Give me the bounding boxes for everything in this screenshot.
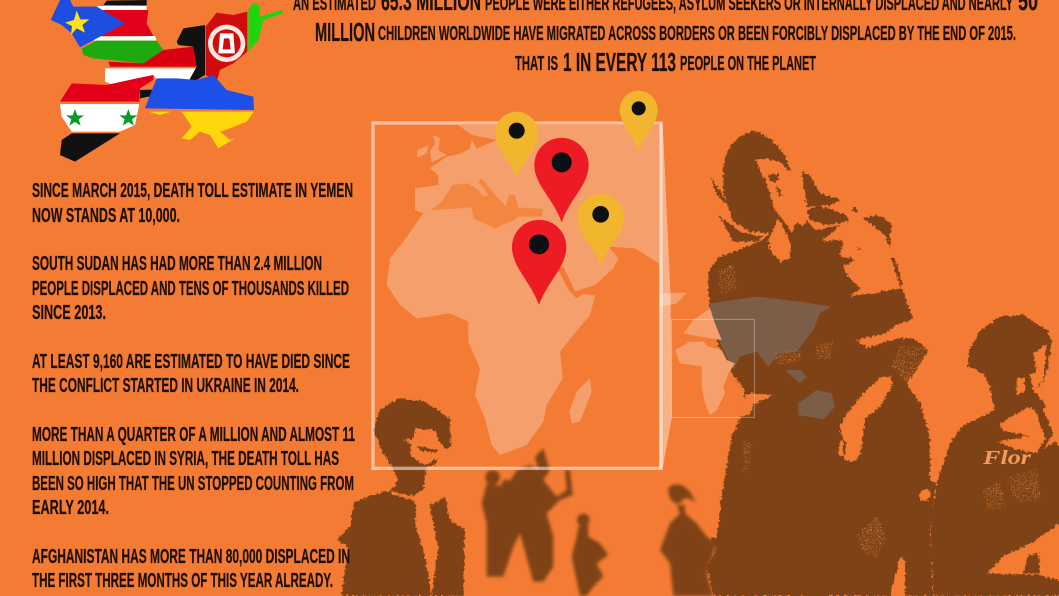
pin: yellow top centre bbox=[495, 112, 538, 178]
text block: Afghanistan bbox=[32, 545, 350, 592]
flag map: Syria bbox=[60, 75, 153, 162]
map frame bbox=[373, 123, 672, 468]
text block: Yemen: NOW STANDS AT 10,000. bbox=[32, 204, 180, 227]
text block: South Sudan: SOUTH SUDAN HAS HAD MORE THAN 2.4 MILLION bbox=[32, 252, 322, 275]
map pins bbox=[495, 91, 658, 305]
text block: South Sudan: PEOPLE DISPLACED AND TENS OF THOUSANDS KILLED bbox=[32, 277, 349, 300]
text block: Afghanistan: AFGHANISTAN HAS MORE THAN 80,000 DISPLACED IN bbox=[32, 545, 350, 568]
heading: global displacement statement: PEOPLE ON THE PLANET bbox=[680, 53, 816, 75]
text block: Syria: MILLION DISPLACED IN SYRIA, THE DEATH TOLL HAS bbox=[32, 447, 339, 470]
small world map over the woman bbox=[660, 293, 835, 419]
conflict country flag maps bbox=[51, 0, 283, 162]
flag map: South Sudan bbox=[51, 0, 163, 63]
text block: Syria: BEEN SO HIGH THAT THE UN STOPPED COUNTING FROM bbox=[32, 472, 354, 495]
text block: South Sudan: SINCE 2013. bbox=[32, 301, 106, 324]
text block: Syria bbox=[32, 423, 355, 519]
text block: South Sudan bbox=[32, 252, 349, 324]
silhouettes: distant walking group bbox=[482, 448, 717, 596]
text block: Afghanistan: THE FIRST THREE MONTHS OF THIS YEAR ALREADY. bbox=[32, 569, 333, 592]
flag map: Afghanistan bbox=[177, 3, 283, 82]
text block: Ukraine: AT LEAST 9,160 ARE ESTIMATED TO HAVE DIED SINCE bbox=[32, 350, 350, 373]
pin: yellow Arabia bbox=[577, 194, 624, 265]
text block: Ukraine: THE CONFLICT STARTED IN UKRAINE IN 2014. bbox=[32, 374, 299, 397]
flag map: Yemen bbox=[105, 47, 198, 98]
pin: red Syria region bbox=[534, 138, 589, 222]
text block: Yemen bbox=[32, 179, 353, 227]
heading: global displacement statement: THAT IS bbox=[515, 53, 558, 75]
map: Africa, Europe and Middle East bbox=[387, 125, 659, 455]
text block: Ukraine bbox=[32, 350, 350, 397]
pin: red South Sudan region bbox=[512, 220, 566, 305]
flag map: Ukraine bbox=[145, 75, 254, 148]
silhouette: woman carrying child bbox=[707, 131, 937, 596]
heading: global displacement statement bbox=[293, 0, 1038, 77]
text block: Syria: EARLY 2014. bbox=[32, 496, 109, 519]
text block: Yemen: SINCE MARCH 2015, DEATH TOLL ESTIMATE IN YEMEN bbox=[32, 179, 353, 202]
shirt lettering: Flor bbox=[982, 447, 1031, 469]
heading: global displacement statement: 1 IN EVERY 113 bbox=[563, 47, 676, 77]
silhouette: child on the left bbox=[337, 398, 465, 596]
text block: Syria: MORE THAN A QUARTER OF A MILLION AND ALMOST 11 bbox=[32, 423, 355, 446]
heading: global displacement statement: MILLION bbox=[315, 17, 375, 47]
silhouette: older child on the right bbox=[930, 315, 1059, 596]
pin: yellow top right bbox=[620, 91, 658, 152]
